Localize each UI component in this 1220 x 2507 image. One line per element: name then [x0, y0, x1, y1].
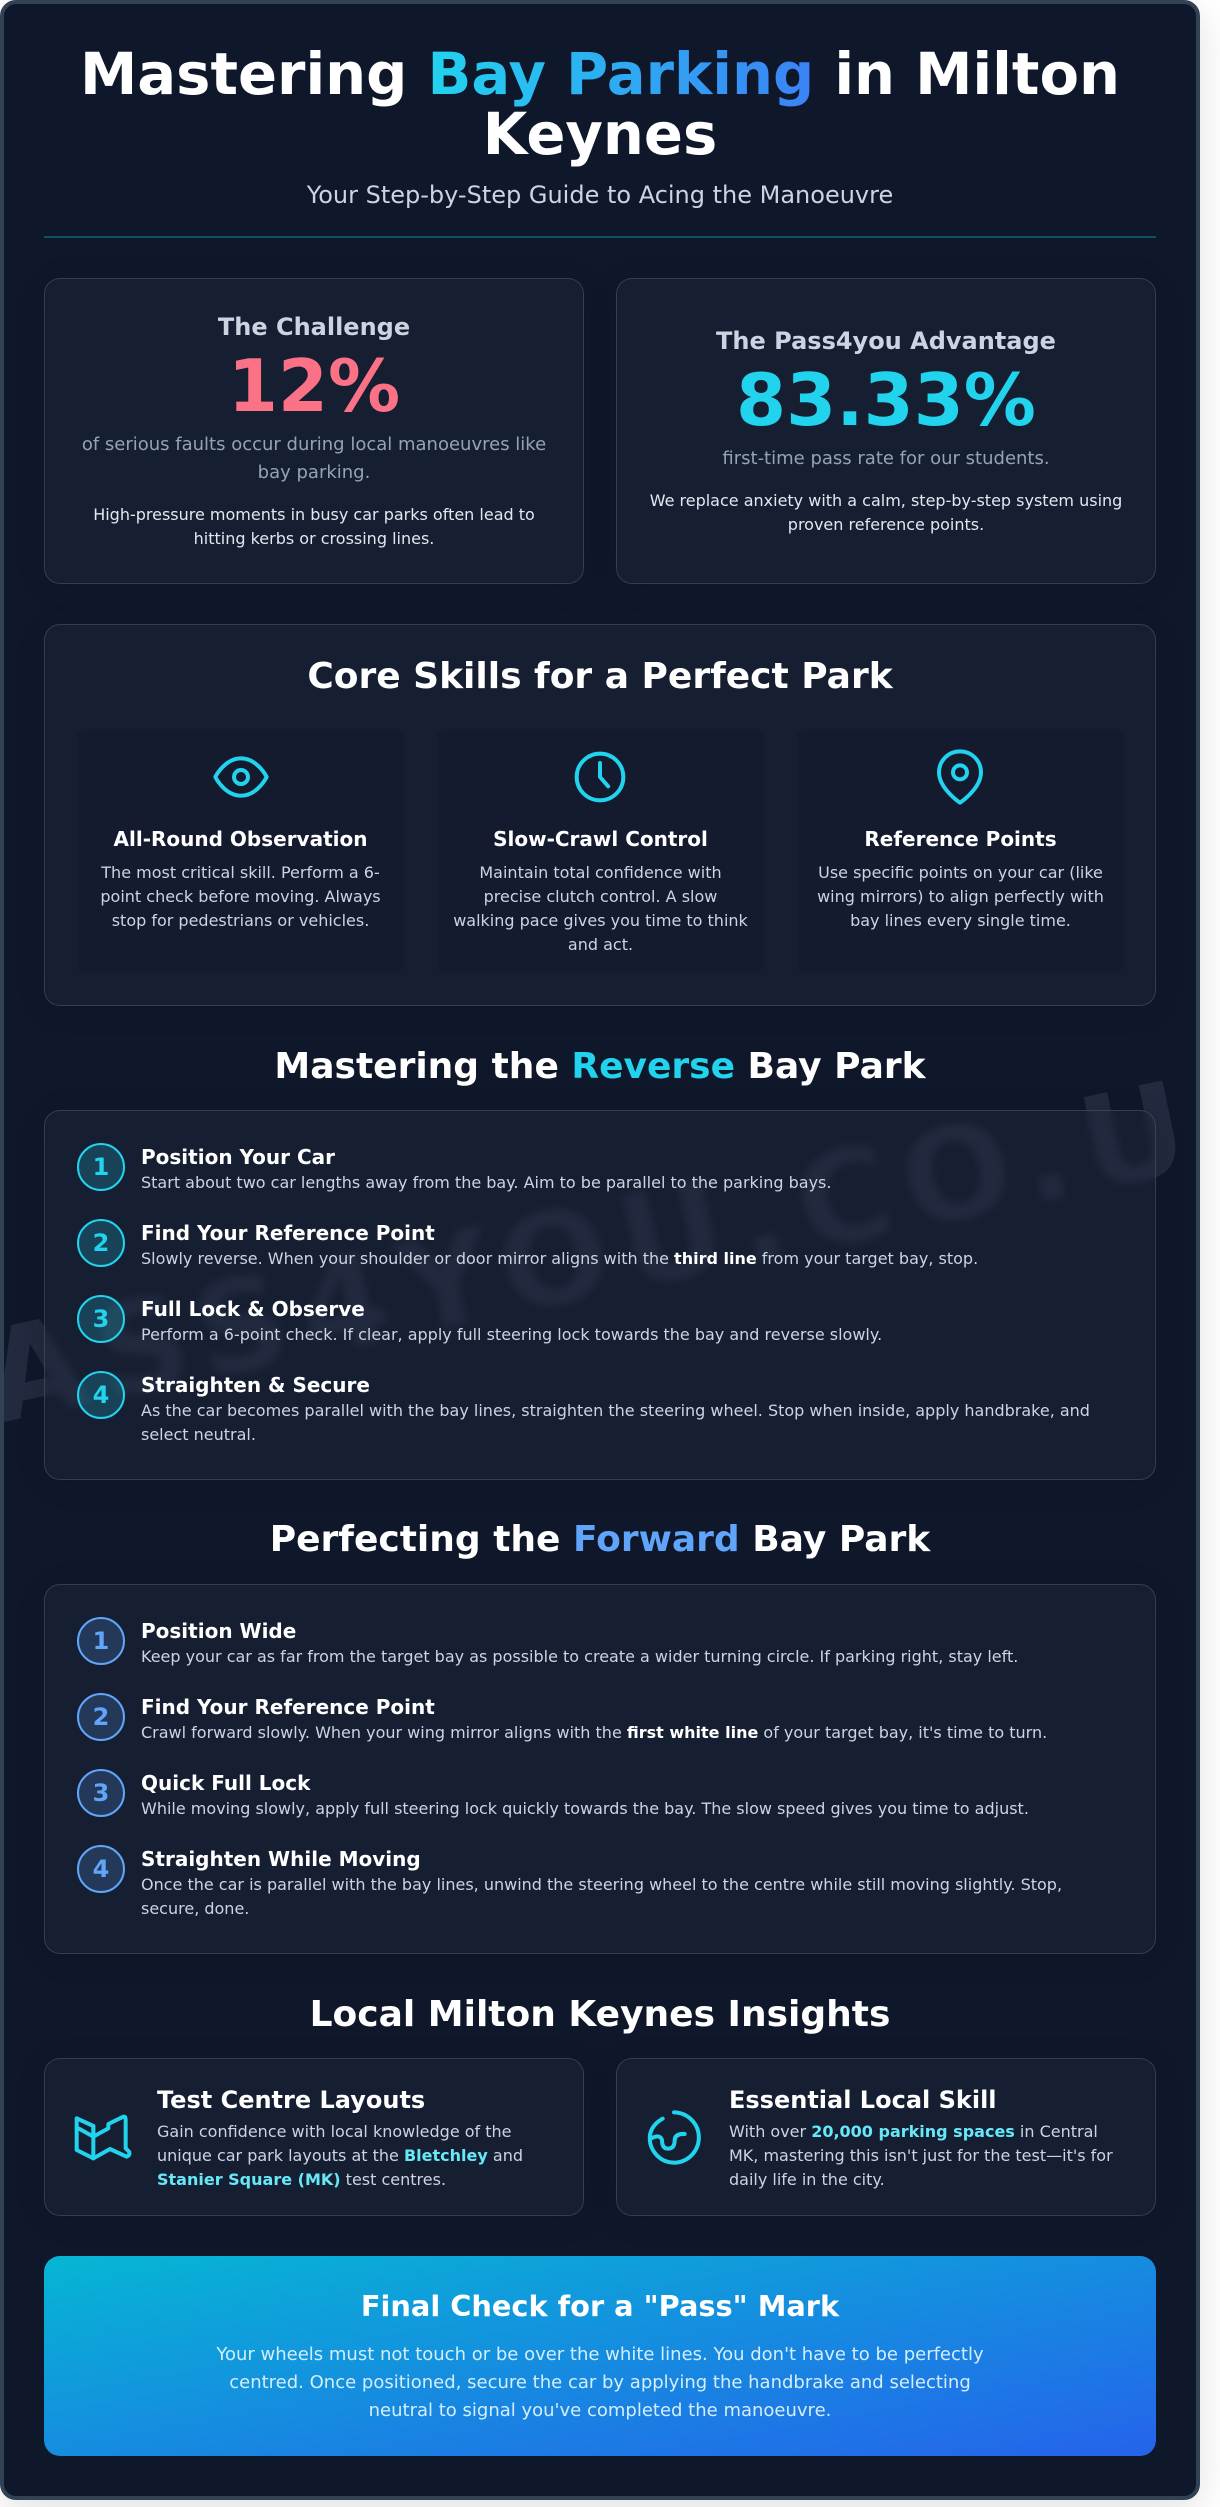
challenge detail	[93, 505, 535, 548]
panel: test centre layouts	[44, 2058, 584, 2216]
insight text: layouts: Gain confidence with local knowledge of the	[157, 2122, 512, 2141]
reverse step 4 title: Straighten & Secure	[141, 1373, 370, 1397]
skill title: slow crawl: Slow-Crawl Control	[493, 827, 708, 851]
forward step 4 text	[141, 1875, 1062, 1918]
forward step 1 title: Position Wide	[141, 1619, 296, 1643]
reverse step 4 number: 4	[93, 1381, 109, 1409]
insight text: local skill: MK, mastering this isn't just for the test—it's for	[729, 2146, 1113, 2165]
icon: map	[74, 2114, 132, 2160]
reverse step 4 text: As the car becomes parallel with the bay lines, straighten the steering wheel. Stop when inside, apply handbrake, and	[141, 1401, 1090, 1420]
skill text: reference points: Use specific points on your car (like	[818, 863, 1103, 882]
panel: forward steps	[44, 1584, 1156, 1954]
skill title: observation: All-Round Observation	[114, 827, 367, 851]
forward step 4 text: Once the car is parallel with the bay lines, unwind the steering wheel to the centre while still moving slightly. Stop,	[141, 1875, 1062, 1894]
skill text: slow crawl: walking pace gives you time to think	[453, 911, 748, 930]
reverse step 4 text: select neutral.	[141, 1425, 256, 1444]
insight text: layouts: unique car park layouts at the Bletchley and	[157, 2146, 523, 2165]
callout text	[216, 2344, 984, 2421]
skill text: slow crawl	[453, 863, 748, 954]
callout heading: Final Check for a "Pass" Mark	[361, 2289, 839, 2323]
challenge label: The Challenge	[218, 313, 410, 341]
skill text: slow crawl: and act.	[568, 935, 633, 954]
forward step 1 number: 1	[93, 1627, 109, 1655]
forward step 1 text: Keep your car as far from the target bay as possible to create a wider turning circle. If parking right, stay left.	[141, 1647, 1018, 1666]
icon: eye	[213, 756, 269, 798]
skill text: slow crawl: precise clutch control. A slow	[484, 887, 717, 906]
forward step 4 number: 4	[93, 1855, 109, 1883]
reverse step 4 number	[77, 1371, 125, 1419]
callout text: Your wheels must not touch or be over the white lines. You don't have to be perfectly	[216, 2344, 984, 2365]
forward step 4 title: Straighten While Moving	[141, 1847, 421, 1871]
forward step 2 number: 2	[93, 1703, 109, 1731]
panel: reverse steps	[44, 1110, 1156, 1480]
insight title: layouts: Test Centre Layouts	[157, 2086, 425, 2114]
insight title: local skill: Essential Local Skill	[729, 2086, 997, 2114]
reverse step 3 number	[77, 1295, 125, 1343]
insight text: layouts	[157, 2122, 523, 2189]
forward step 3 number: 3	[93, 1779, 109, 1807]
subtitle: Your Step-by-Step Guide to Acing the Manoeuvre	[307, 181, 893, 209]
panel: core skills	[44, 624, 1156, 1006]
forward step 3 number	[77, 1769, 125, 1817]
reverse step 3 number: 3	[93, 1305, 109, 1333]
reverse step 2 number: 2	[93, 1229, 109, 1257]
reverse step 2 number	[77, 1219, 125, 1267]
reverse step 1 number: 1	[93, 1153, 109, 1181]
icon: clock	[574, 752, 626, 802]
challenge description	[82, 434, 546, 483]
skill text: observation	[100, 863, 381, 930]
insight text: local skill	[729, 2122, 1113, 2189]
skill title: reference points: Reference Points	[864, 827, 1057, 851]
advantage description: first-time pass rate for our students.	[722, 448, 1050, 469]
reverse step 4 text	[141, 1401, 1090, 1444]
forward step 3 title: Quick Full Lock	[141, 1771, 310, 1795]
insight text: local skill: daily life in the city.	[729, 2170, 885, 2189]
forward step 3 text: While moving slowly, apply full steering lock quickly towards the bay. The slow speed gives you time to adjust.	[141, 1799, 1029, 1818]
title: Mastering Bay Parking in Milton	[80, 41, 1120, 108]
reverse step 3 title: Full Lock & Observe	[141, 1297, 365, 1321]
advantage stat: 83.33%	[736, 358, 1036, 442]
skill text: observation: stop for pedestrians or vehicles.	[112, 911, 369, 930]
callout text: centred. Once positioned, secure the car by applying the handbrake and selecting	[229, 2372, 971, 2393]
advantage detail	[650, 491, 1122, 534]
heading: local insights: Local Milton Keynes Insights	[310, 1994, 890, 2035]
challenge detail: High-pressure moments in busy car parks often lead to	[93, 505, 535, 524]
forward step 4 number	[77, 1845, 125, 1893]
panel: essential local skill	[616, 2058, 1156, 2216]
reverse step 1 text: Start about two car lengths away from the bay. Aim to be parallel to the parking bays.	[141, 1173, 831, 1192]
skill text: observation: The most critical skill. Perform a 6-	[101, 863, 380, 882]
forward step 2 text: Crawl forward slowly. When your wing mirror aligns with the first white line of your target bay, it's time to turn.	[141, 1723, 1047, 1742]
challenge description: bay parking.	[258, 462, 370, 483]
challenge description: of serious faults occur during local manoeuvres like	[82, 434, 546, 455]
divider	[44, 236, 1156, 238]
skill card: reference points	[797, 729, 1124, 972]
reverse step 2 text: Slowly reverse. When your shoulder or door mirror aligns with the third line from your target bay, stop.	[141, 1249, 978, 1268]
reverse step 1 number	[77, 1143, 125, 1191]
callout text: neutral to signal you've completed the manoeuvre.	[369, 2400, 831, 2421]
reverse step 2 title: Find Your Reference Point	[141, 1221, 435, 1245]
advantage detail: proven reference points.	[788, 515, 984, 534]
advantage detail: We replace anxiety with a calm, step-by-step system using	[650, 491, 1122, 510]
reverse step 1 title: Position Your Car	[141, 1145, 335, 1169]
heading: reverse bay park: Mastering the Reverse Bay Park	[274, 1046, 926, 1087]
challenge detail: hitting kerbs or crossing lines.	[194, 529, 434, 548]
skill text: reference points: wing mirrors) to align perfectly with	[817, 887, 1104, 906]
forward step 4 text: secure, done.	[141, 1899, 249, 1918]
panel: final check callout	[44, 2256, 1156, 2456]
insight text: local skill: With over 20,000 parking spaces in Central	[729, 2122, 1098, 2141]
reverse step 3 text: Perform a 6-point check. If clear, apply full steering lock towards the bay and reverse slowly.	[141, 1325, 882, 1344]
core skills heading: Core Skills for a Perfect Park	[307, 656, 893, 697]
challenge stat: 12%	[228, 344, 400, 428]
skill text: observation: point check before moving. Always	[100, 887, 381, 906]
insight text: layouts: Stanier Square (MK) test centres.	[157, 2170, 446, 2189]
icon: roundabout	[648, 2110, 701, 2165]
icon: map pin	[937, 749, 983, 805]
skill text: reference points: bay lines every single time.	[850, 911, 1071, 930]
title: Keynes	[483, 101, 717, 168]
forward step 2 title: Find Your Reference Point	[141, 1695, 435, 1719]
panel: the pass4you advantage	[616, 278, 1156, 584]
skill card: slow crawl	[437, 729, 764, 972]
heading: forward bay park: Perfecting the Forward Bay Park	[270, 1519, 930, 1560]
skill card: observation	[77, 729, 404, 972]
skill text: reference points	[817, 863, 1104, 930]
forward step 2 number	[77, 1693, 125, 1741]
skill text: slow crawl: Maintain total confidence with	[479, 863, 722, 882]
forward step 1 number	[77, 1617, 125, 1665]
panel: the challenge	[44, 278, 584, 584]
advantage label: The Pass4you Advantage	[716, 327, 1056, 355]
title	[80, 41, 1120, 168]
